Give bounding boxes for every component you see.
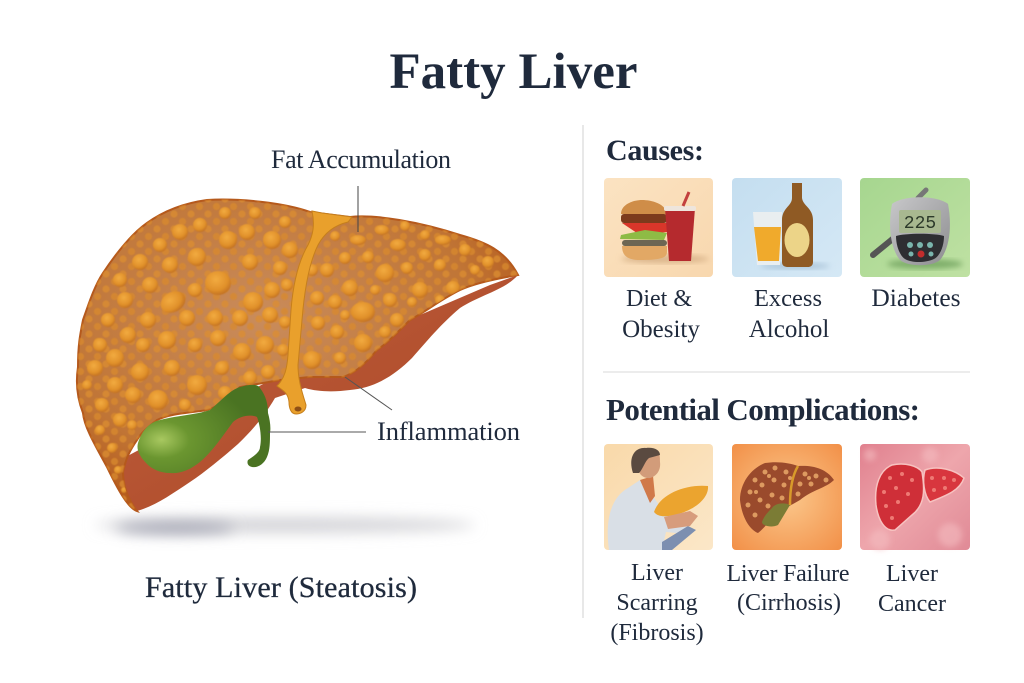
label: Liver Failure bbox=[726, 561, 850, 587]
label: Diet & bbox=[626, 286, 692, 312]
label: Liver bbox=[631, 560, 683, 586]
liver underside bbox=[112, 275, 518, 511]
cause: excess alcohol bbox=[732, 178, 842, 343]
label: Cancer bbox=[878, 591, 946, 617]
title: Fatty Liver bbox=[390, 44, 638, 100]
label: Scarring bbox=[616, 590, 698, 616]
horizontal divider bbox=[603, 371, 970, 373]
illustration: fatty liver bbox=[77, 200, 518, 534]
cause: diet and obesity bbox=[604, 178, 713, 343]
vertical divider bbox=[582, 125, 584, 618]
heading: complications: Potential Complications: bbox=[606, 392, 920, 427]
complication: cancer bbox=[860, 444, 970, 617]
ground shadow bbox=[95, 517, 475, 534]
gallbladder bbox=[137, 385, 270, 473]
label: Inflammation bbox=[268, 377, 520, 446]
label: Liver bbox=[886, 561, 938, 587]
complication: fibrosis bbox=[604, 444, 713, 646]
caption: Fatty Liver (Steatosis) bbox=[145, 571, 417, 604]
label: Excess bbox=[754, 285, 822, 312]
label: (Cirrhosis) bbox=[737, 590, 841, 616]
panel: potential complications bbox=[604, 392, 970, 646]
label: Inflammation: Inflammation bbox=[377, 416, 520, 446]
label: Alcohol bbox=[749, 316, 829, 343]
label: Diabetes bbox=[871, 283, 961, 312]
doctor coat bbox=[608, 480, 688, 550]
liver surface bbox=[77, 200, 518, 511]
cause: diabetes bbox=[860, 178, 970, 312]
meter reading: 225 bbox=[904, 214, 936, 234]
label: (Fibrosis) bbox=[610, 620, 704, 646]
falciform ligament bbox=[277, 211, 352, 414]
panel: causes bbox=[604, 134, 970, 343]
heading: causes: Causes: bbox=[606, 134, 704, 167]
small fat droplets bbox=[77, 200, 518, 511]
complication: cirrhosis bbox=[726, 444, 850, 616]
label: Obesity bbox=[622, 316, 700, 343]
fat globules bbox=[82, 207, 494, 493]
label: Fat Accumulation: Fat Accumulation bbox=[271, 145, 451, 174]
